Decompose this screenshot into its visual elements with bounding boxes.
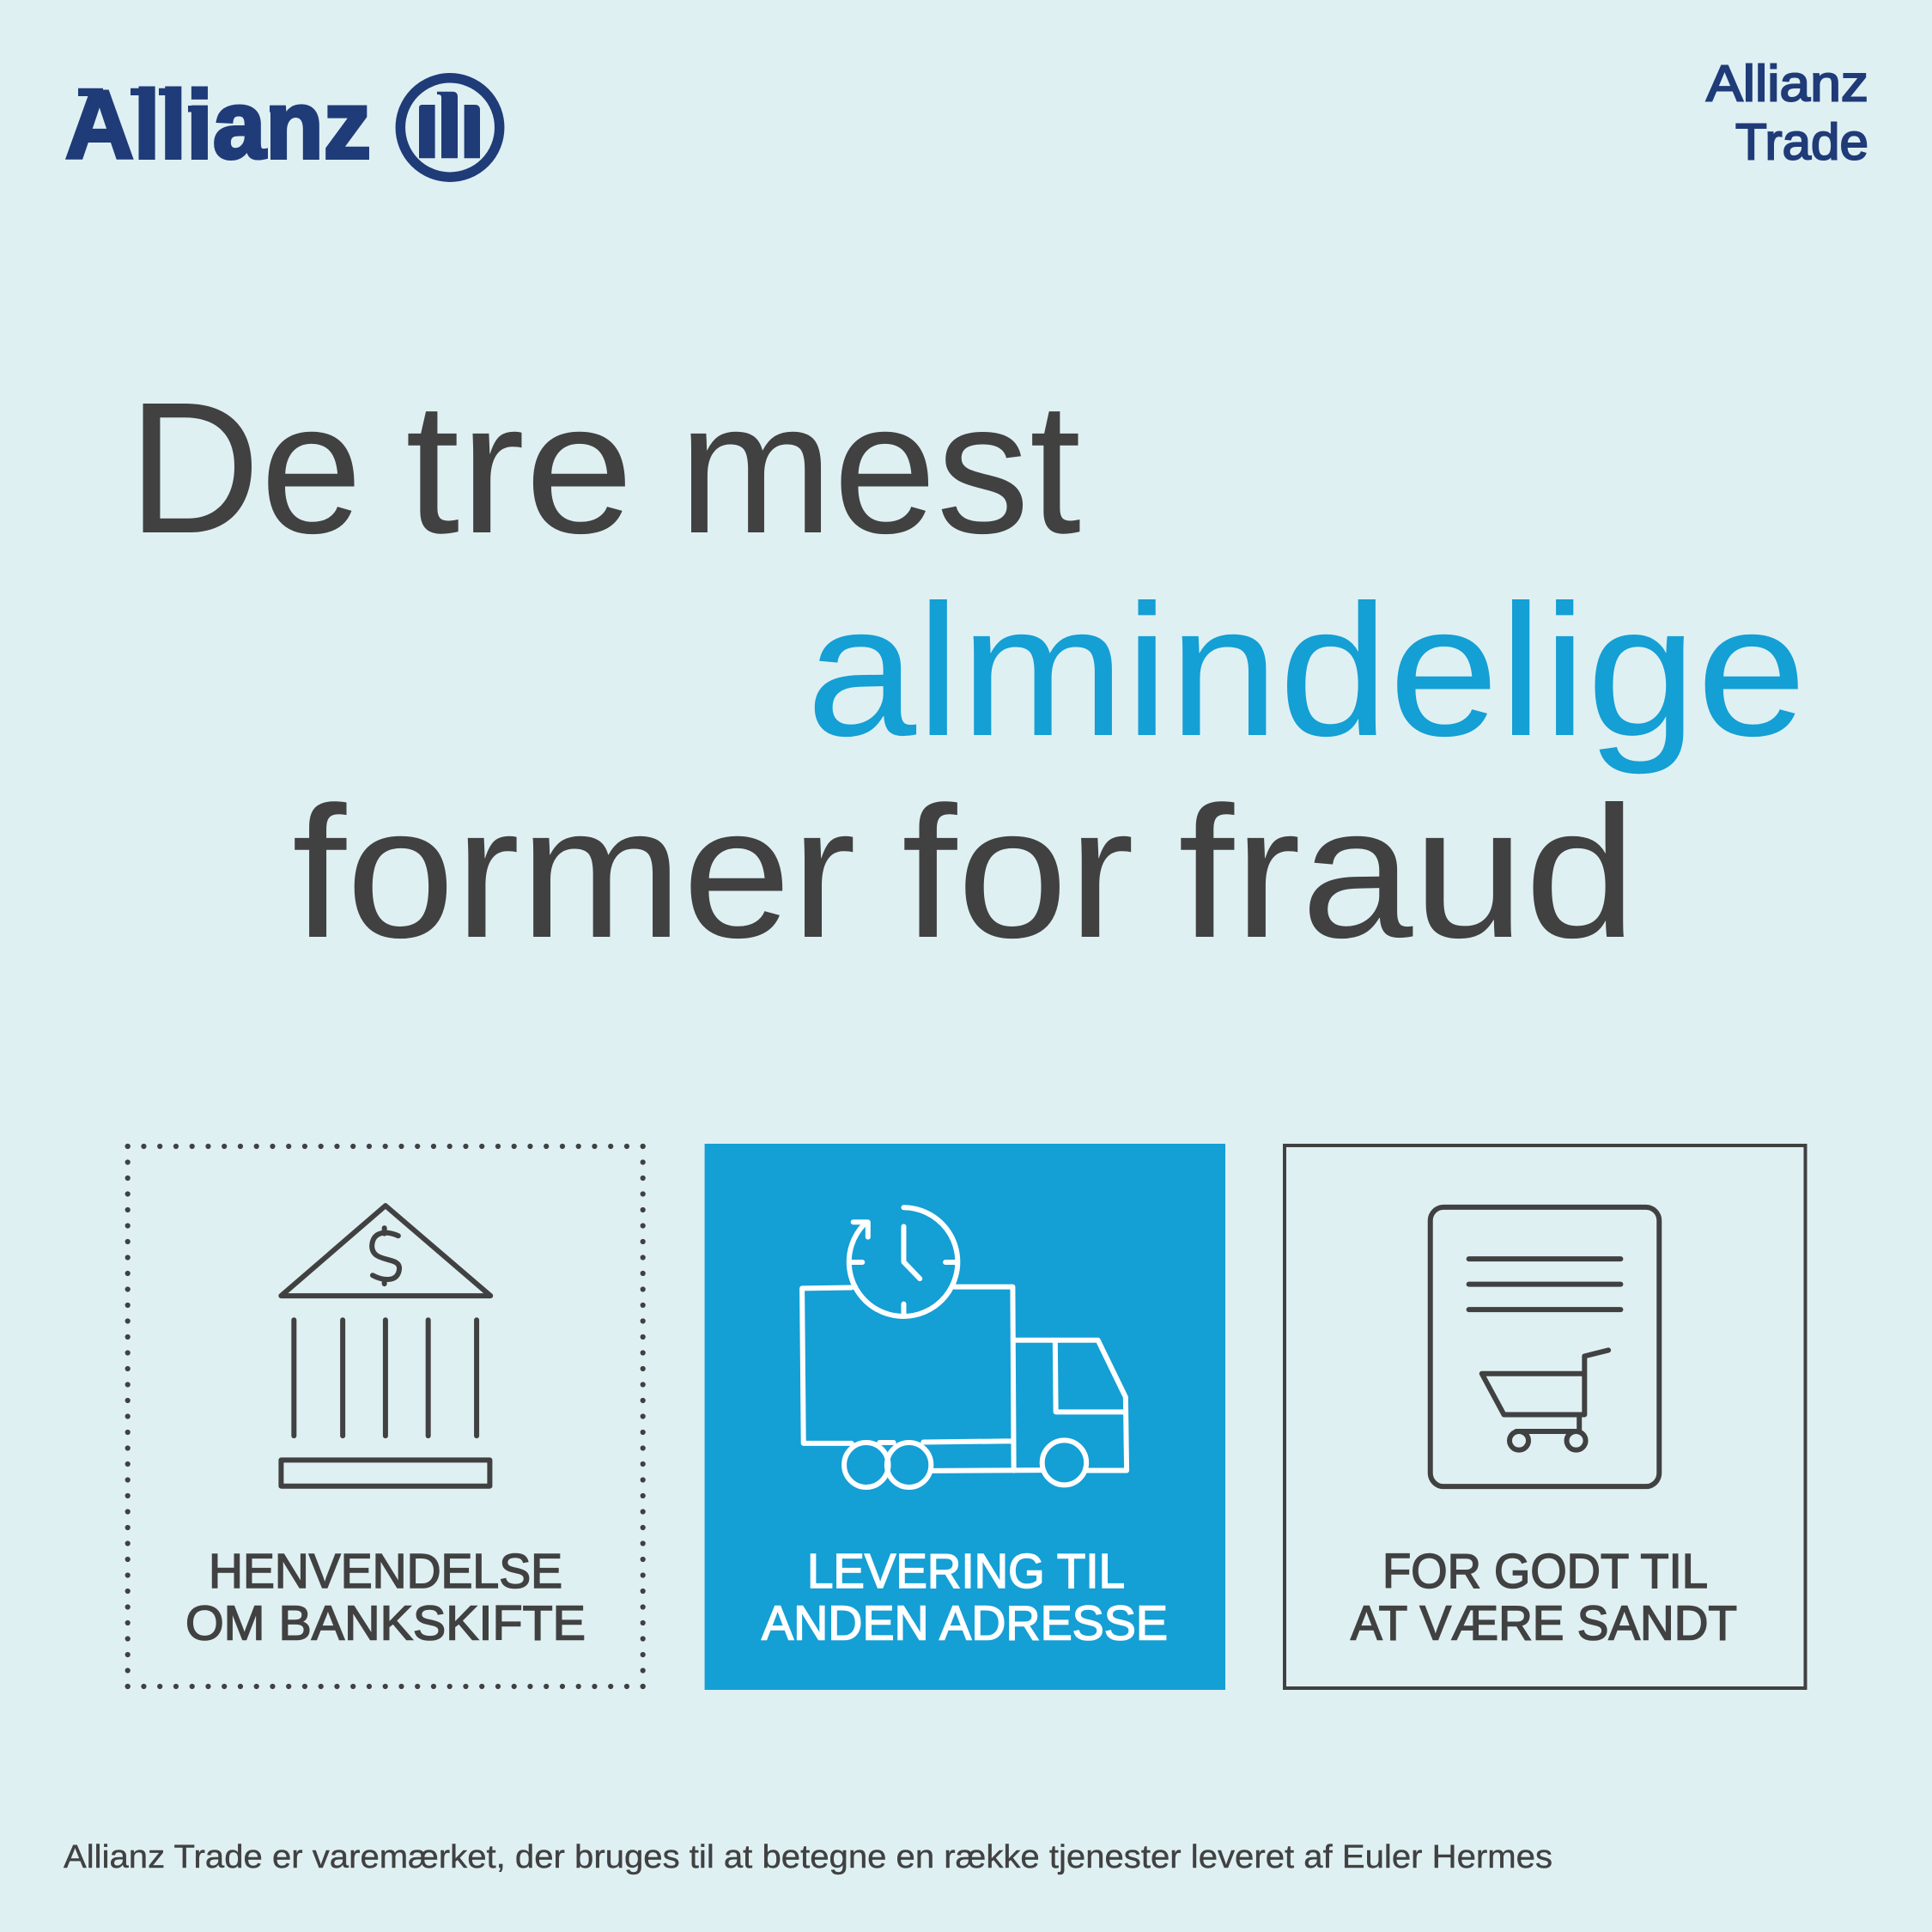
label: ANDEN ADRESSE	[762, 1595, 1168, 1650]
panel: delivery to another address	[705, 1144, 1225, 1690]
label	[762, 1544, 1168, 1650]
label: LEVERING TIL	[807, 1544, 1125, 1599]
brand name: Allianz Trade	[1706, 56, 1868, 170]
brand name: Allianz Trade: Trade	[1735, 113, 1868, 170]
panel: too good to be true	[1285, 1145, 1805, 1688]
title: fraud	[1178, 769, 1637, 977]
title: almindelige	[806, 567, 1807, 775]
title: mest	[678, 364, 1081, 573]
icon: delivery truck with clock	[802, 1207, 1127, 1487]
title: tre	[405, 364, 634, 573]
emblem	[400, 78, 500, 177]
brand name: Allianz Trade: Allianz	[1706, 56, 1868, 112]
footer note: Allianz Trade er varemærket, der bruges til at betegne en række tjenester leveret af Euler Hermes	[64, 1839, 1552, 1875]
truck	[802, 1287, 1127, 1487]
label: HENVENDELSE	[209, 1544, 562, 1599]
wordmark: Allianz	[65, 71, 371, 179]
label	[185, 1544, 586, 1650]
panel: bank switch request	[128, 1146, 644, 1687]
logo: Allianz wordmark and emblem	[65, 71, 500, 179]
label: FOR GODT TIL	[1382, 1544, 1708, 1599]
title: for	[902, 769, 1134, 977]
title: former	[292, 769, 856, 977]
title: De	[128, 364, 362, 573]
icon: document with shopping cart	[1431, 1207, 1659, 1486]
icon: bank building with dollar sign	[281, 1206, 490, 1486]
label: AT VÆRE SANDT	[1351, 1595, 1737, 1650]
label: OM BANKSKIFTE	[185, 1595, 586, 1650]
label	[1351, 1544, 1737, 1650]
clock	[849, 1207, 957, 1316]
title	[128, 364, 1807, 977]
cart	[1482, 1350, 1608, 1450]
